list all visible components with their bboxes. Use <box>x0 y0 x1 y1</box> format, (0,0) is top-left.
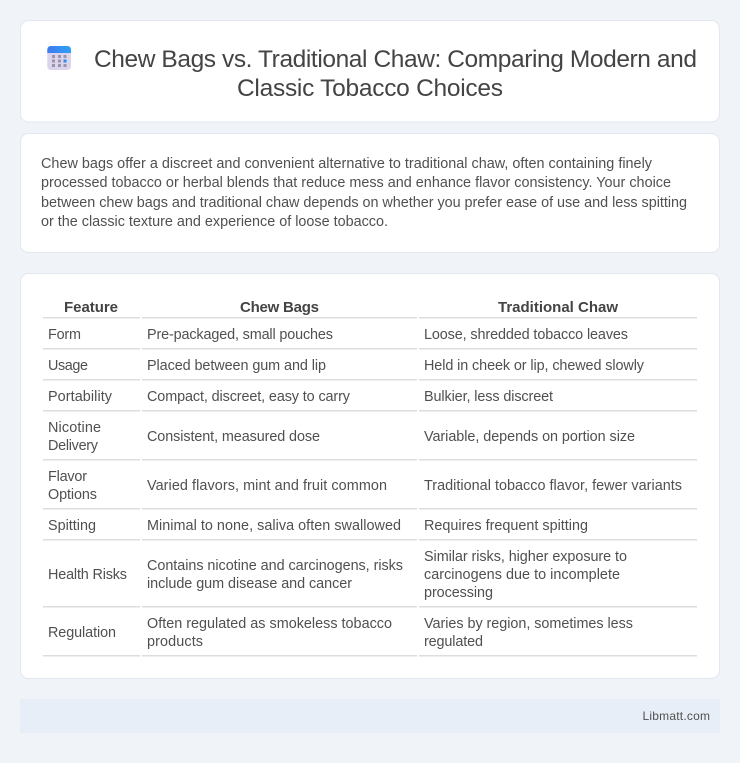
panel: introduction <box>20 134 720 252</box>
row: health risks: processing <box>424 585 493 601</box>
intro text block <box>41 156 687 230</box>
title: Classic Tobacco Choices <box>237 75 503 102</box>
row: health risks: Contains nicotine and carcinogens, risks <box>147 558 403 574</box>
row: portability: Compact, discreet, easy to carry <box>147 389 351 405</box>
title: Chew Bags vs. Traditional Chaw: Comparing Modern and <box>94 46 697 73</box>
intro text block: between chew bags and traditional chaw depends on whether you prefer ease of use and less spitting <box>41 195 687 211</box>
row: flavor options: Varied flavors, mint and fruit common <box>147 478 387 494</box>
row: form <box>43 327 697 350</box>
intro text block: Chew bags offer a discreet and convenient alternative to traditional chaw, often containing finely <box>41 156 653 172</box>
intro text block: processed tobacco or herbal blends that reduce mess and enhance flavor consistency. Your choice <box>41 175 671 191</box>
row: usage <box>43 358 697 380</box>
intro text block: or the classic texture and experience of loose tobacco. <box>41 214 388 230</box>
row: regulation: Often regulated as smokeless tobacco <box>147 616 392 632</box>
panel: comparison table <box>20 274 720 678</box>
footer bar <box>20 699 720 733</box>
row: regulation <box>43 616 697 656</box>
row: form: Loose, shredded tobacco leaves <box>424 327 628 343</box>
table header row: Feature <box>64 299 118 316</box>
row: health risks: Health Risks <box>48 567 127 583</box>
row: flavor options: Traditional tobacco flavor, fewer variants <box>424 478 682 494</box>
table header row: Traditional Chaw <box>498 299 618 316</box>
row: nicotine delivery <box>43 420 697 460</box>
row: spitting <box>43 518 697 540</box>
row: spitting: Requires frequent spitting <box>424 518 588 534</box>
table header row <box>43 299 697 318</box>
row: health risks: carcinogens due to incomplete <box>424 567 620 583</box>
row: portability <box>43 389 697 412</box>
row: nicotine delivery: Delivery <box>48 438 99 454</box>
row: flavor options: Flavor <box>48 469 87 485</box>
row: portability: Bulkier, less discreet <box>424 389 553 405</box>
row: nicotine delivery: Nicotine <box>48 420 101 436</box>
row: usage: Usage <box>48 358 88 374</box>
row: usage: Held in cheek or lip, chewed slowly <box>424 358 645 374</box>
row: health risks <box>43 549 697 608</box>
footer bar: Libmatt.com <box>642 709 710 723</box>
row: spitting: Spitting <box>48 518 96 534</box>
row: regulation: products <box>147 634 203 650</box>
row: flavor options <box>43 469 697 510</box>
row: form: Pre-packaged, small pouches <box>147 327 333 343</box>
row: regulation: regulated <box>424 634 483 650</box>
table header row: Chew Bags <box>240 299 319 316</box>
icon: calendar grid <box>47 46 71 70</box>
row: spitting: Minimal to none, saliva often swallowed <box>147 518 401 534</box>
row: nicotine delivery: Consistent, measured dose <box>147 429 320 445</box>
panel: header <box>20 20 720 122</box>
row: regulation: Varies by region, sometimes less <box>424 616 633 632</box>
row: form: Form <box>48 327 81 343</box>
row: regulation: Regulation <box>48 625 116 641</box>
title <box>94 46 697 102</box>
row: nicotine delivery: Variable, depends on portion size <box>424 429 635 445</box>
row: health risks: include gum disease and cancer <box>147 576 352 592</box>
row: flavor options: Options <box>48 487 97 503</box>
row: usage: Placed between gum and lip <box>147 358 326 374</box>
row: portability: Portability <box>48 389 113 405</box>
row: health risks: Similar risks, higher exposure to <box>424 549 627 565</box>
